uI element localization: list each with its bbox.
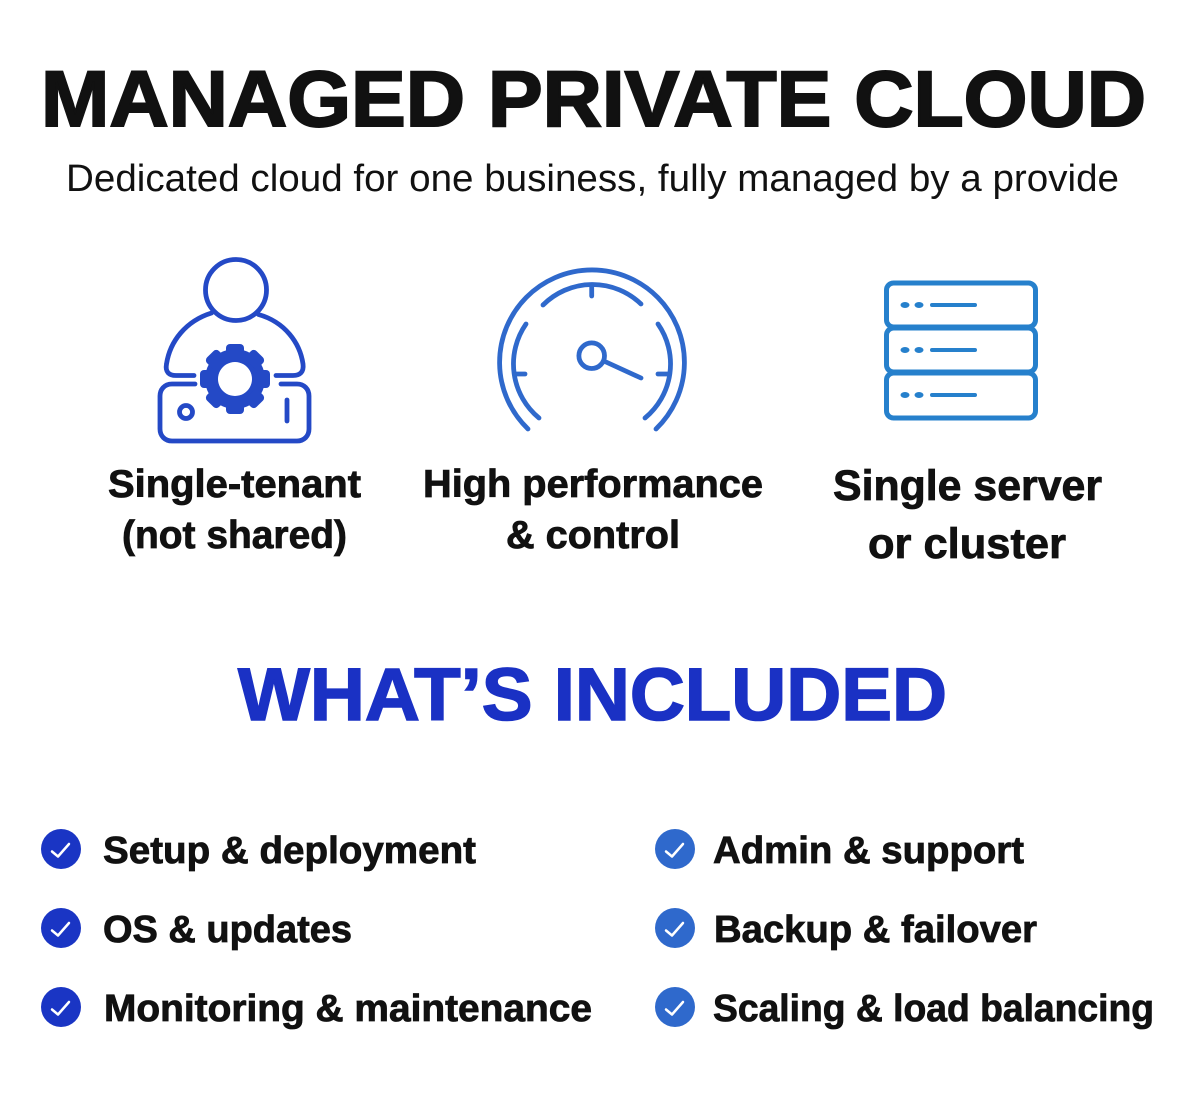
item: admin and support: Admin & support <box>713 830 1024 872</box>
label: single server or cluster: Single server <box>833 462 1102 510</box>
panel: single server or cluster <box>833 283 1102 568</box>
title: MANAGED PRIVATE CLOUD <box>41 54 1146 143</box>
heading: what's included: WHAT’S INCLUDED <box>238 653 947 736</box>
label: single server or cluster: or cluster <box>868 520 1066 568</box>
subtitle: Dedicated cloud for one business, fully managed by a provide <box>66 158 1119 200</box>
label: single-tenant <box>108 463 361 557</box>
label: single-tenant: Single-tenant <box>108 463 361 506</box>
item: OS and updates: OS & updates <box>103 909 352 951</box>
icon: server stack <box>886 283 1036 418</box>
item: scaling and load balancing: Scaling & load balancing <box>713 988 1154 1030</box>
icon: speedometer gauge <box>500 270 684 429</box>
panel: included list right column <box>655 829 1154 1030</box>
item: monitoring and maintenance: Monitoring & maintenance <box>104 988 592 1030</box>
panel: high performance <box>423 270 763 557</box>
label: high performance: High performance <box>423 463 763 506</box>
label: single-tenant: (not shared) <box>122 514 347 557</box>
label: high performance <box>423 463 763 557</box>
label: single server or cluster <box>833 462 1102 568</box>
panel: single-tenant <box>108 260 361 557</box>
label: high performance: & control <box>506 514 680 557</box>
icon: person with gear <box>160 260 309 441</box>
item: setup and deployment: Setup & deployment <box>103 830 476 872</box>
item: backup and failover: Backup & failover <box>714 909 1037 951</box>
panel: included list left column <box>41 829 592 1030</box>
